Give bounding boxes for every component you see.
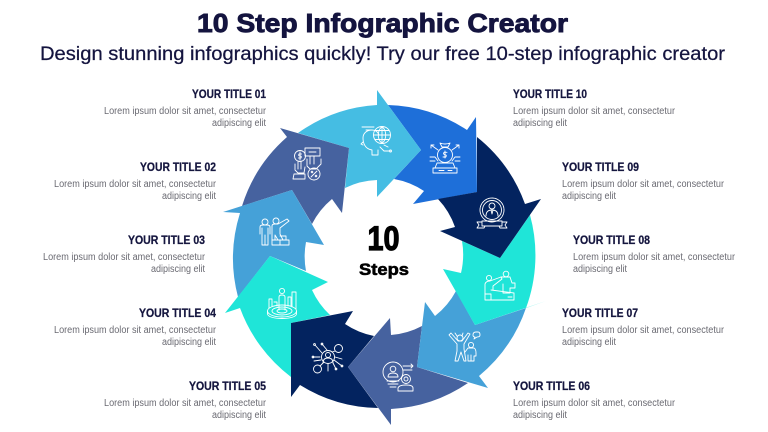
icon: hands with coin and percent	[293, 148, 321, 180]
text block: title 04	[54, 306, 217, 348]
text block: title 06	[513, 379, 676, 421]
icon: celebrating people	[449, 332, 480, 361]
arrow 03	[223, 190, 324, 297]
icon: head and globe	[361, 126, 392, 155]
subtitle: Design stunning infographics quickly! Try our free 10-step infographic creator	[40, 44, 726, 65]
center word: Steps	[359, 260, 409, 279]
text block: title 10	[513, 87, 676, 129]
text block: title 03: Lorem ipsum dolor sit amet, consectetur	[43, 252, 206, 263]
text block: title 02: Lorem ipsum dolor sit amet, consectetur	[54, 179, 217, 190]
text block: title 09: YOUR TITLE 09	[562, 160, 639, 174]
text block: title 04: adipiscing elit	[162, 337, 216, 348]
text block: title 01	[104, 87, 267, 129]
center label	[359, 220, 409, 279]
text block: title 03: adipiscing elit	[151, 264, 205, 275]
text block: title 08	[573, 233, 736, 275]
arrow 01	[298, 90, 421, 197]
text block: title 07: adipiscing elit	[562, 337, 616, 348]
text block: title 08: Lorem ipsum dolor sit amet, consectetur	[573, 252, 736, 263]
arrow 04	[225, 256, 330, 377]
text block: title 05: Lorem ipsum dolor sit amet, consectetur	[104, 398, 267, 409]
text block: title 07	[562, 306, 725, 348]
icon: person on target with bars	[268, 288, 296, 318]
text block: title 10: YOUR TITLE 10	[513, 87, 587, 101]
text block: title 10: Lorem ipsum dolor sit amet, consectetur	[513, 106, 676, 117]
text block: title 08: YOUR TITLE 08	[573, 233, 650, 247]
text block: title 05: adipiscing elit	[212, 410, 266, 421]
circular arrow ring	[223, 90, 546, 425]
text block: title 07: YOUR TITLE 07	[562, 306, 638, 320]
arrow 10	[388, 105, 477, 204]
arrow 02	[242, 128, 349, 224]
icon: award badge with person	[477, 198, 507, 228]
arrow 08	[443, 215, 546, 325]
arrow 06	[348, 318, 468, 425]
icon: person helping another up	[485, 271, 515, 300]
text block: title 09	[562, 160, 725, 202]
text block: title 05	[104, 379, 267, 421]
text block: title 08: adipiscing elit	[573, 264, 627, 275]
text block: title 09: Lorem ipsum dolor sit amet, consectetur	[562, 179, 725, 190]
icon: money bag and arrows	[430, 143, 460, 173]
text block: title 07: Lorem ipsum dolor sit amet, consectetur	[562, 325, 725, 336]
text block: title 01: adipiscing elit	[212, 118, 266, 129]
title: 10 Step Infographic Creator	[197, 8, 568, 38]
text block: title 05: YOUR TITLE 05	[189, 379, 266, 393]
arrow 07	[417, 291, 526, 388]
text block: title 06: Lorem ipsum dolor sit amet, consectetur	[513, 398, 676, 409]
text block: title 01: YOUR TITLE 01	[192, 87, 266, 101]
center number: 10	[368, 220, 400, 258]
text block: title 02: adipiscing elit	[162, 191, 216, 202]
text block: title 03: YOUR TITLE 03	[128, 233, 205, 247]
text block: title 06: YOUR TITLE 06	[513, 379, 590, 393]
text block: title 09: adipiscing elit	[562, 191, 616, 202]
icon: people on steps pointing	[260, 218, 289, 245]
text block: title 03	[43, 233, 206, 275]
arrow 09	[438, 137, 541, 258]
text block: title 02: YOUR TITLE 02	[140, 160, 216, 174]
text block: title 02	[54, 160, 217, 202]
icon: network of people	[312, 343, 343, 373]
icon: bulb and person	[383, 362, 413, 391]
text block: title 04: YOUR TITLE 04	[139, 306, 216, 320]
text block: title 06: adipiscing elit	[513, 410, 567, 421]
arrow 05	[291, 311, 378, 408]
text block: title 04: Lorem ipsum dolor sit amet, consectetur	[54, 325, 217, 336]
text block: title 01: Lorem ipsum dolor sit amet, consectetur	[104, 106, 267, 117]
text block: title 10: adipiscing elit	[513, 118, 567, 129]
